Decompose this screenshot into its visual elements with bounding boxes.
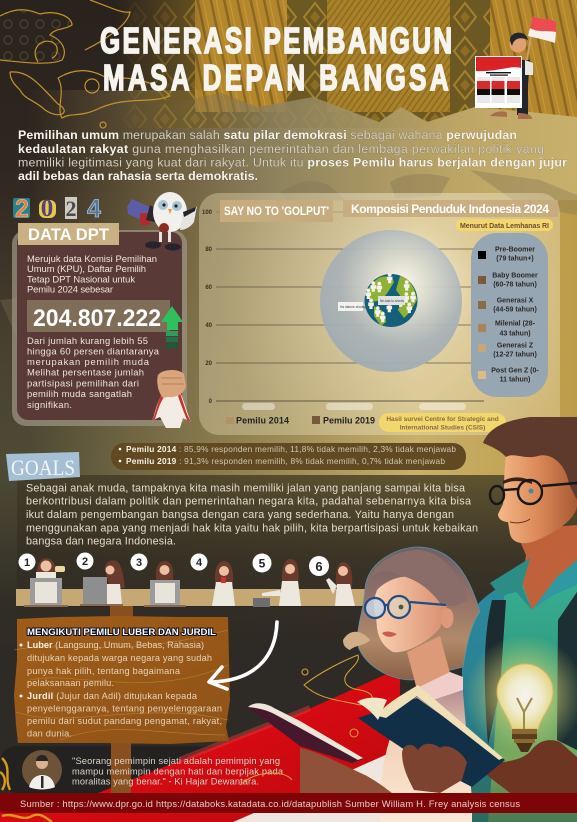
icon: mascot with megaphone xyxy=(127,192,197,251)
small chart tooltips: Ha datone shortag xyxy=(340,305,366,309)
legend: generations: 11 tahun) xyxy=(500,376,530,384)
panel: election survey bullets: Pemilu 2014 : 85,9% responden memilih, 11,8% tidak memilih, 2,3% tidak menjawab xyxy=(126,444,456,454)
legend: generations: Generasi X xyxy=(497,298,534,304)
flag pole xyxy=(525,16,535,68)
source pill: Lemhanas xyxy=(456,219,553,231)
jacket inner lapels xyxy=(485,600,506,745)
boy body xyxy=(505,60,530,115)
text: KPU intro: Tetap DPT Nasional untuk xyxy=(27,274,135,284)
mountain silhouette xyxy=(110,93,577,200)
step 3: 3 xyxy=(136,557,142,569)
legend: generations: Baby Boomer xyxy=(492,272,538,280)
intro paragraph: kedaulatan rakyat guna menghasilkan pemerintahan dan lembaga perwakilan politik yang xyxy=(18,142,544,156)
illustration: gold swirl on flag xyxy=(240,655,372,785)
lips xyxy=(382,631,397,637)
title: GENERASI PEMBANGUN xyxy=(100,21,452,61)
y axis labels: 0 xyxy=(209,399,213,405)
list: luber jurdil: penyelenggaranya, tentang penyelenggaraan xyxy=(27,704,222,714)
decorative 2024 letters: 2 xyxy=(66,196,76,221)
big number: 204.807.222 xyxy=(33,305,161,332)
list: luber jurdil: ditujukan kepada warga negara yang sudah xyxy=(27,653,212,663)
text: KPU intro: Umum (KPU), Daftar Pemilih xyxy=(27,263,146,274)
heading: komposisi: Komposisi Penduduk Indonesia 2024 xyxy=(351,202,549,216)
legend: generations xyxy=(471,233,548,397)
y axis labels: 20 xyxy=(205,361,213,367)
step 1: 1 xyxy=(24,557,30,569)
dark content panel xyxy=(0,475,577,822)
bulb glow xyxy=(465,635,577,755)
panel: election survey bullets: Pemilu 2019 : 91,3% responden memilih, 8% tidak memilih, 0,7% tidak menjawab xyxy=(126,456,445,466)
text: young voters: signifikan. xyxy=(27,399,72,410)
batik cloud ornament top left xyxy=(0,0,170,128)
text: young voters: Dari jumlah kurang lebih 55 xyxy=(27,335,148,346)
panel: luber jurdil sign board xyxy=(14,616,230,744)
body xyxy=(380,680,472,822)
glasses xyxy=(365,596,446,618)
circle background xyxy=(320,230,462,372)
red and white flag xyxy=(0,668,410,822)
text: goals paragraph: Sebagai anak muda, tampaknya kita masih memiliki jalan yang panjang sampai kita bisa xyxy=(26,482,465,494)
intro paragraph xyxy=(18,128,567,183)
heading: say no to golput xyxy=(220,200,333,222)
legend: generations: Pre-Boomer xyxy=(495,246,535,254)
source pill: CSIS: Hasil survei Centre for Strategic and xyxy=(386,416,499,423)
footer: sources xyxy=(0,793,577,813)
heading: data DPT xyxy=(18,223,119,245)
title: MASA DEPAN BANGSA xyxy=(103,58,449,98)
legend: elections xyxy=(226,416,375,426)
text: young voters: pemilih muda sangatlah xyxy=(27,388,132,399)
hair curl xyxy=(343,632,370,650)
heading: goals tape: GOALS xyxy=(11,455,75,480)
panel: quote dark strip xyxy=(0,746,320,793)
text: goals paragraph: ikut dalam pengembangan bangsa dengan cara yang sederhana. Yaitu hanya dengan xyxy=(26,509,454,521)
source pill: CSIS xyxy=(379,413,506,432)
heading: mengikuti pemilu: MENGIKUTI PEMILU LUBER DAN JURDIL xyxy=(27,627,216,638)
y axis labels: 60 xyxy=(205,285,213,291)
collar xyxy=(417,672,463,700)
quote text xyxy=(72,756,284,786)
text: KPU intro: Pemilu 2024 sebesar xyxy=(27,284,113,294)
ballot poster xyxy=(475,56,522,108)
list: luber jurdil: pelaksanaan pemilu. xyxy=(27,678,114,688)
arrow: white curved xyxy=(209,622,277,689)
gold ornaments bottom left xyxy=(0,758,52,822)
panel: chart composition xyxy=(199,193,560,435)
legend: generations: Generasi Z xyxy=(497,342,534,350)
source pill: Lemhanas: Menurut Data Lemhanas RI xyxy=(460,223,549,230)
intro paragraph: Pemilihan umum merupakan salah satu pilar demokrasi sebagai wahana perwujudan xyxy=(18,128,517,142)
text: goals paragraph: menggunakan apa yang menjadi hak kita yaitu hak pilih, kita berpartisipasi untuk kebaikan xyxy=(26,522,478,534)
icon: green arrow xyxy=(161,306,183,348)
decorative 2024 letters xyxy=(13,195,101,223)
hand xyxy=(477,740,577,793)
step 2 xyxy=(76,552,125,606)
decorative 2024 letters: 4 xyxy=(87,195,101,223)
collar xyxy=(490,558,532,610)
quote text: moralitas yang benar." - Ki Hajar Dewantara. xyxy=(72,776,259,786)
book xyxy=(357,685,505,787)
glasses xyxy=(490,480,577,504)
light bulb xyxy=(497,664,553,752)
source pill: CSIS: International Studies (CSIS) xyxy=(400,424,485,432)
legend: generations: (12-27 tahun) xyxy=(493,352,537,358)
step 2: 2 xyxy=(82,556,88,568)
heading: say no to golput: SAY NO TO 'GOLPUT' xyxy=(224,206,329,218)
illustration: young man with light bulb xyxy=(462,417,577,822)
text: goals paragraph xyxy=(26,482,478,548)
ear xyxy=(440,608,454,628)
list: luber jurdil: dan dunia. xyxy=(27,728,72,738)
intro paragraph: adil bebas dan rahasia serta demokratis. xyxy=(18,169,258,183)
legend: generations: (79 tahun+) xyxy=(496,256,534,262)
fringe xyxy=(365,550,468,606)
y axis labels: 40 xyxy=(205,323,213,329)
wood grain xyxy=(14,630,228,740)
step 1 xyxy=(18,554,68,607)
quote text: mampu memimpin dengan hati dan berpijak pada xyxy=(72,766,284,776)
face xyxy=(374,576,447,652)
step 4: 4 xyxy=(196,557,203,569)
back hair xyxy=(357,547,480,680)
legend: generations: Post Gen Z (0- xyxy=(491,368,539,374)
legend: generations: (60-78 tahun) xyxy=(493,282,537,288)
heading: data DPT: DATA DPT xyxy=(28,226,109,244)
step 3 xyxy=(130,554,186,607)
flag xyxy=(528,16,556,43)
indonesia map silhouettes background xyxy=(0,170,577,345)
illustration: girl with book xyxy=(343,547,505,822)
legend: elections: Pemilu 2014 xyxy=(236,416,289,426)
panel: data DPT xyxy=(12,223,191,428)
neck xyxy=(515,525,577,610)
small chart tooltips xyxy=(338,296,405,311)
text: goals paragraph: bangsa dan negara Indonesia. xyxy=(26,536,176,548)
step 5: 5 xyxy=(259,556,266,570)
text: young voters xyxy=(27,335,160,410)
text: KPU intro: Merujuk data Komisi Pemilihan xyxy=(27,253,157,264)
intro paragraph: memiliki legitimasi yang kuat dari rakyat. Untuk itu proses Pemilu harus berjalan dengan jujur xyxy=(18,156,567,170)
voting steps strip xyxy=(16,552,366,607)
text: young voters: Melihat persentase jumlah xyxy=(27,366,144,378)
legend: generations: (44-59 tahun) xyxy=(493,306,537,314)
hair xyxy=(483,417,577,500)
illustration: boy with flag and ballot poster xyxy=(475,16,556,119)
legend: generations: 43 tahun) xyxy=(499,330,531,338)
small chart tooltips: Ne-tata tu-shoda xyxy=(380,299,404,303)
batik pattern header xyxy=(123,0,577,128)
neck xyxy=(407,636,450,690)
step 6: 6 xyxy=(315,559,323,574)
jacket xyxy=(462,556,577,822)
step 5 xyxy=(252,554,301,607)
y axis labels: 80 xyxy=(205,247,213,253)
list: luber jurdil xyxy=(20,640,222,738)
legend: elections: Pemilu 2019 xyxy=(323,416,375,426)
icon: raised fist with flag xyxy=(151,370,191,428)
text: young voters: merupakan pemilih muda xyxy=(27,356,150,367)
list: luber jurdil: pemilu dari sudut pandang pengamat, rakyat, xyxy=(27,716,222,726)
icon: globe with people xyxy=(364,273,418,327)
hand on book xyxy=(402,744,467,793)
decorative 2024 letters: 0 xyxy=(41,195,53,222)
shirt xyxy=(488,566,577,822)
step 4 xyxy=(190,554,235,606)
legend: generations: Milenial (28- xyxy=(495,320,536,328)
decorative 2024 letters: 2 xyxy=(15,195,29,223)
y axis and grid xyxy=(216,212,484,401)
wooden sign post xyxy=(110,606,133,794)
face xyxy=(498,448,577,543)
y axis labels: 100 xyxy=(202,210,213,216)
text: young voters: partisipasi pemilihan dari xyxy=(27,378,139,388)
text: young voters: hingga 60 persen diantaranya xyxy=(27,346,160,356)
footer: sources: Sumber : https://www.dpr.go.id https://databoks.katadata.co.id/datapublish Sumber William H. Frey analysis census xyxy=(20,798,520,809)
list: luber jurdil: Luber (Langsung, Umum, Bebas, Rahasia) xyxy=(27,640,204,650)
title xyxy=(100,21,452,98)
panel: election survey bullets xyxy=(111,443,466,470)
list: luber jurdil: punya hak pilih, tentang bagaimana xyxy=(27,666,181,676)
icon: Ki Hajar Dewantara portrait xyxy=(22,750,62,790)
quote text: "Seorang pemimpin sejati adalah pemimpin yang xyxy=(72,756,280,766)
step 6 xyxy=(309,556,355,606)
text: goals paragraph: berkontribusi dalam politik dan pemerintahan negara kita, padahal sebenarnya kita bisa xyxy=(26,496,471,508)
bar label placeholders xyxy=(242,403,466,410)
list: luber jurdil: Jurdil (Jujur dan Adil) ditujukan kepada xyxy=(27,691,198,701)
text: KPU intro xyxy=(27,253,157,294)
illustration: open dark book xyxy=(248,703,392,793)
y axis labels xyxy=(202,210,213,405)
